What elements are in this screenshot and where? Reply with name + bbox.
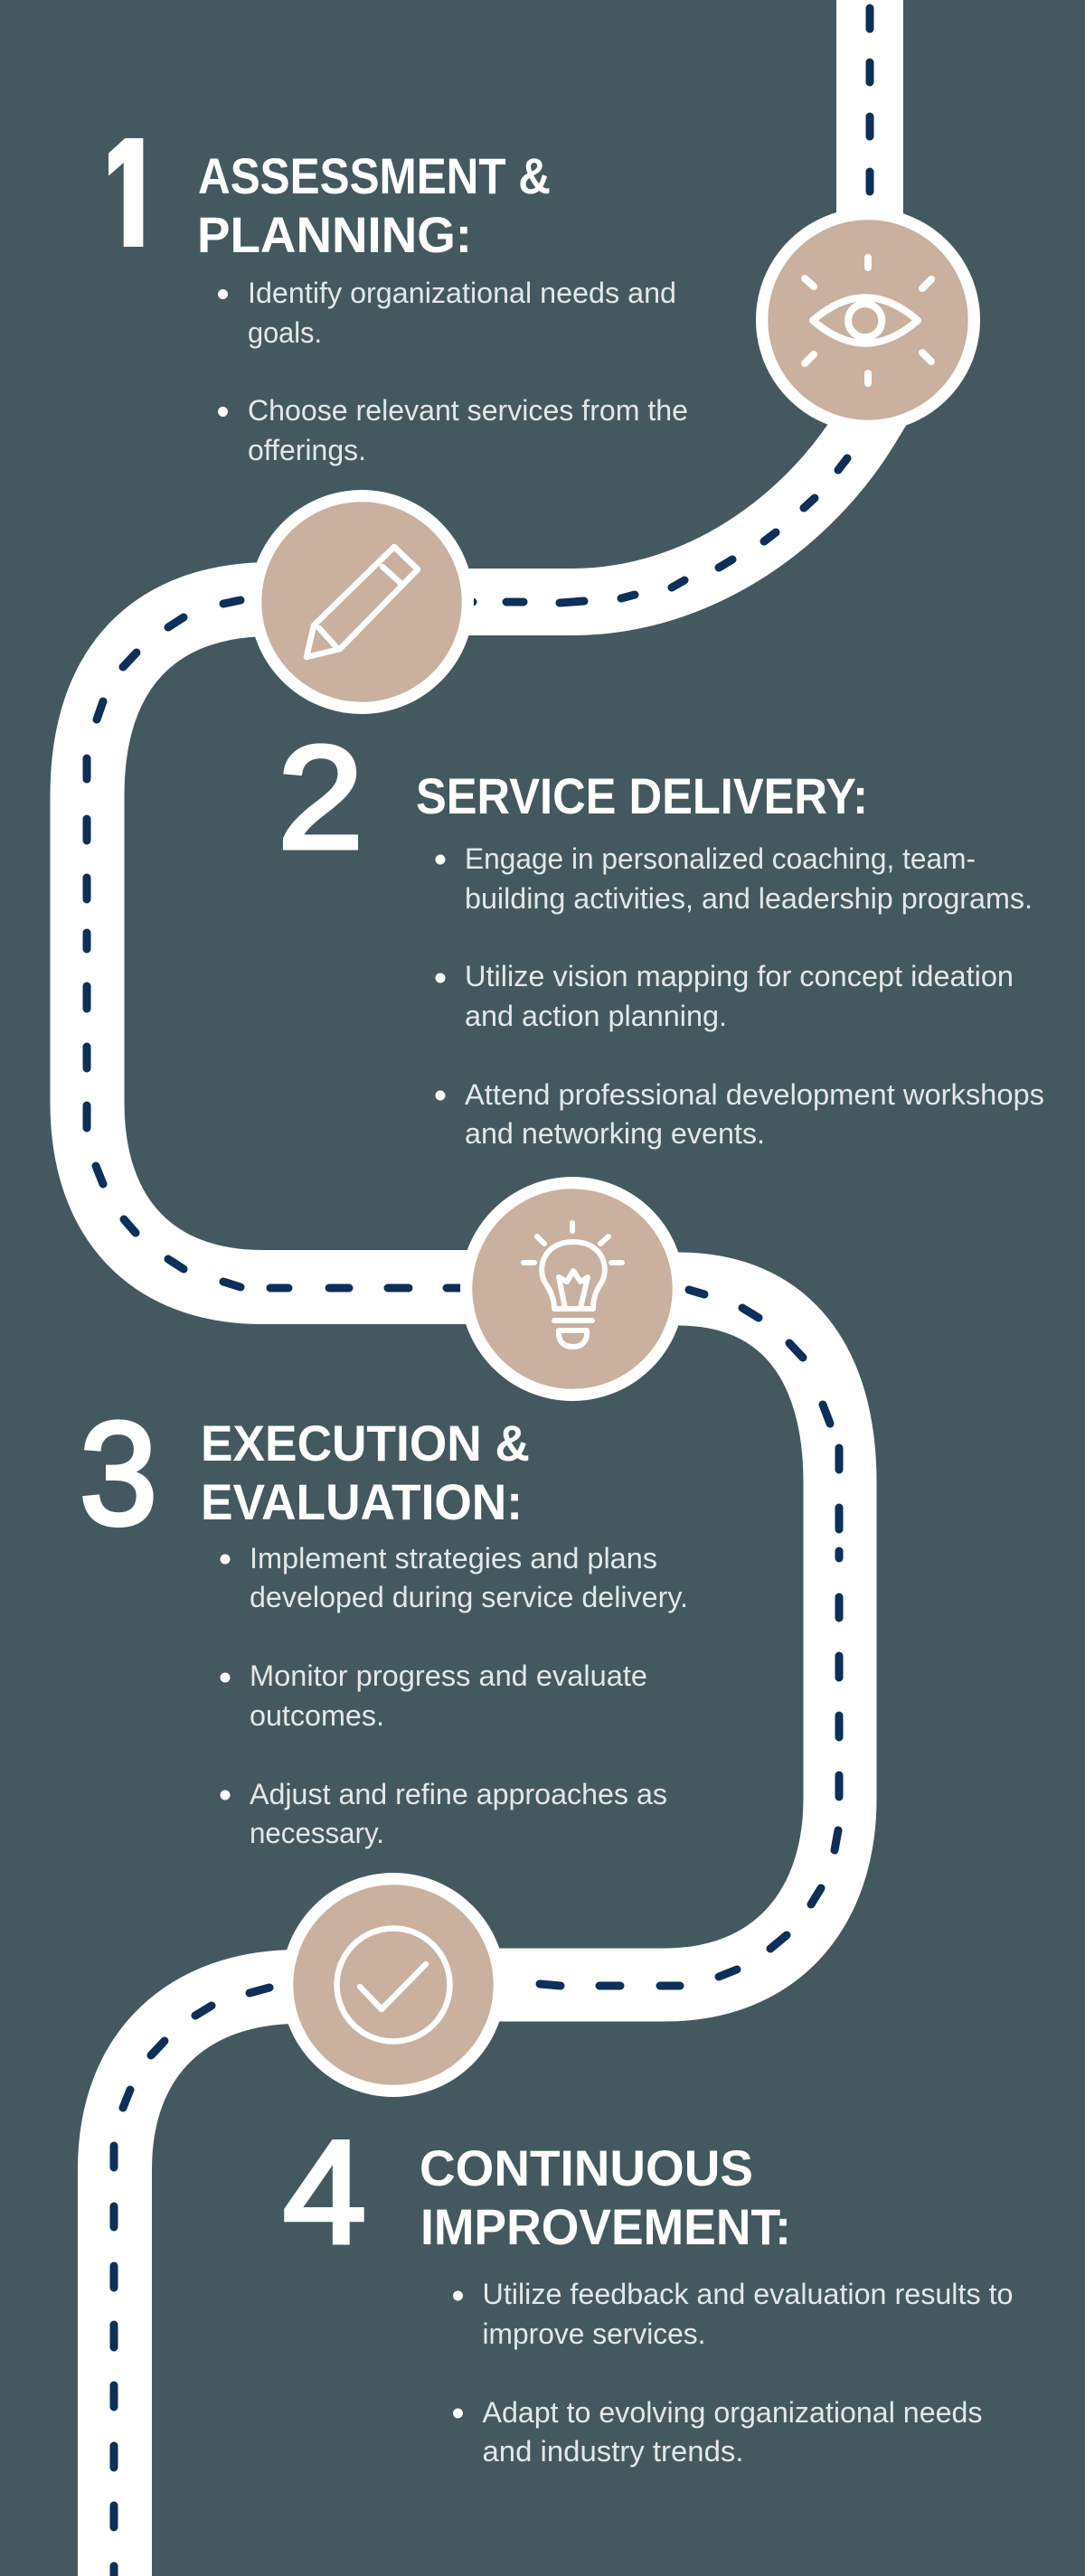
dashes: bulb to check	[540, 1290, 839, 1986]
bullet list: step 2: Engage in personalized coaching, team-	[465, 842, 976, 875]
badge fill	[768, 220, 968, 420]
badge fill	[472, 1189, 673, 1389]
number 2: 2	[278, 716, 363, 879]
panel: step 4	[283, 2111, 1013, 2468]
icon badge: eye	[756, 208, 980, 432]
road segment: bulb to check	[393, 1289, 840, 1985]
bullet list: step 3: Adjust and refine approaches as	[250, 1778, 667, 1810]
heading: continuous improvement	[420, 2139, 791, 2255]
bullet list: step 3: necessary.	[250, 1817, 384, 1849]
bullet list: step 2: building activities, and leadership programs.	[465, 882, 1033, 915]
badge ring	[281, 1873, 505, 2097]
pencil glyph	[307, 547, 418, 657]
heading: continuous improvement: CONTINUOUS	[420, 2139, 753, 2196]
bullet list: step 4: Utilize feedback and evaluation results to	[483, 2278, 1013, 2310]
bullet list: step 1: offerings.	[248, 434, 366, 466]
bullet list: step 1: goals.	[248, 316, 322, 349]
bullet list: step 4: and industry trends.	[483, 2435, 743, 2468]
bullet list: step 2: Attend professional development workshops	[465, 1078, 1044, 1111]
heading: execution and evaluation: EVALUATION:	[201, 1473, 523, 1530]
bullet list: step 4	[453, 2278, 1013, 2468]
badge fill	[293, 1885, 494, 2085]
dashes: top stretch	[466, 8, 870, 603]
badge ring	[756, 208, 980, 432]
bullet list: step 4: Adapt to evolving organizational needs	[483, 2396, 982, 2429]
dashes: check to bottom	[114, 1988, 269, 2576]
bullet list: step 1	[218, 277, 688, 466]
bullet list: step 2: and networking events.	[465, 1117, 765, 1150]
bullet list: step 3: Monitor progress and evaluate	[250, 1659, 647, 1692]
check glyph	[336, 1929, 450, 2041]
bullet list: step 4: improve services.	[483, 2317, 705, 2350]
road centre dashes	[87, 8, 870, 2576]
heading: service delivery: SERVICE DELIVERY:	[416, 767, 868, 824]
number 1: 1	[93, 99, 167, 309]
heading: execution and evaluation: EXECUTION &	[201, 1415, 530, 1471]
road segment: check to bottom	[115, 1987, 393, 2576]
road segment: pencil to bulb	[87, 599, 572, 1287]
heading: assessment and planning: PLANNING:	[197, 206, 472, 263]
bullet list: step 2: Utilize vision mapping for concept ideation	[465, 960, 1014, 992]
bullet list: step 1: Identify organizational needs and	[248, 277, 676, 309]
bullet list: step 3	[221, 1542, 688, 1849]
bullet list: step 3: outcomes.	[250, 1699, 384, 1732]
icon badge: light bulb	[460, 1177, 684, 1401]
number 4: 4	[283, 2111, 366, 2274]
bullet list: step 2: and action planning.	[465, 1000, 727, 1032]
bullet list: step 1: Choose relevant services from the	[248, 394, 688, 427]
heading: continuous improvement: IMPROVEMENT:	[420, 2198, 791, 2255]
heading: execution and evaluation	[201, 1415, 530, 1530]
winding road	[87, 0, 889, 2576]
bullet list: step 3: developed during service delivery.	[250, 1581, 688, 1613]
eye glyph	[805, 258, 931, 383]
number 3: 3	[80, 1392, 157, 1556]
bullet list: step 3: Implement strategies and plans	[250, 1542, 657, 1575]
bulb glyph	[524, 1223, 622, 1347]
heading: assessment and planning	[197, 147, 551, 263]
icon badge: pencil	[250, 490, 474, 714]
heading: assessment and planning: ASSESSMENT &	[198, 147, 551, 204]
bullet list: step 2	[436, 842, 1044, 1150]
icon badge: check mark	[281, 1873, 505, 2097]
panel: step 3	[80, 1392, 688, 1849]
dashes: pencil to bulb	[87, 600, 462, 1288]
badge fill	[261, 502, 462, 702]
road segment: top to pencil	[434, 0, 889, 602]
badge ring	[250, 490, 474, 714]
badge ring	[460, 1177, 684, 1401]
panel: step 1	[108, 137, 687, 466]
panel: step 2	[278, 716, 1044, 1150]
